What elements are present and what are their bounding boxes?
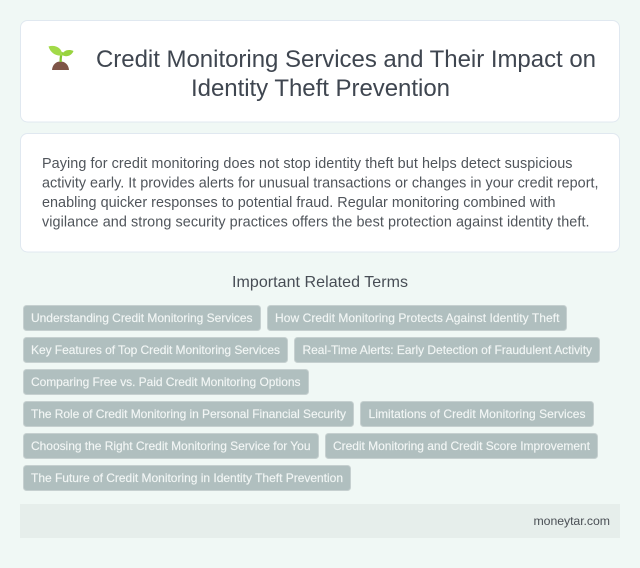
tag: role of credit monitoring: The Role of Credit Monitoring in Personal Financial Security [31, 407, 346, 421]
panel: title header [20, 20, 620, 122]
heading: important related terms: Important Related Terms [232, 274, 408, 291]
tag: how credit monitoring protects [268, 306, 566, 330]
title: Identity Theft Prevention [191, 75, 450, 102]
tag: limitations [360, 402, 594, 426]
tag: credit score improvement: Credit Monitoring and Credit Score Improvement [333, 439, 591, 453]
tag: role of credit monitoring [24, 402, 354, 426]
title: Credit Monitoring Services and Their Impact on [96, 46, 596, 73]
panel: summary paragraph [20, 134, 620, 252]
tag: limitations: Limitations of Credit Monitoring Services [368, 407, 586, 421]
tag: credit score improvement [326, 434, 598, 458]
tag: comparing free vs paid [24, 370, 308, 394]
tag: choosing the right service: Choosing the Right Credit Monitoring Service for You [31, 439, 310, 453]
summary text: Paying for credit monitoring does not stop identity theft but helps detect suspicious [42, 156, 572, 172]
footer bar: moneytar.com [534, 514, 610, 528]
summary text [42, 156, 598, 230]
tag: how credit monitoring protects: How Credit Monitoring Protects Against Identity Theft [275, 311, 560, 325]
summary text: activity early. It provides alerts for unusual transactions or changes in your credit report, [42, 176, 598, 192]
title [96, 46, 596, 102]
tag: future of credit monitoring: The Future of Credit Monitoring in Identity Theft Prevention [31, 471, 343, 485]
tag list [24, 306, 600, 490]
tag: understanding credit monitoring: Understanding Credit Monitoring Services [31, 311, 252, 325]
tag: real-time alerts [294, 338, 600, 362]
tag: understanding credit monitoring [24, 306, 260, 330]
tag: real-time alerts: Real-Time Alerts: Early Detection of Fraudulent Activity [302, 343, 592, 357]
tag: key features: Key Features of Top Credit Monitoring Services [31, 343, 280, 357]
icon: seedling [48, 46, 74, 70]
tag: future of credit monitoring [24, 466, 350, 490]
tag: choosing the right service [24, 434, 318, 458]
summary text: vigilance and strong security practices offers the best protection against identity theft. [42, 214, 590, 230]
tag: key features [24, 338, 288, 362]
footer bar [20, 504, 620, 538]
summary text: enabling quicker responses to potential fraud. Regular monitoring combined with [42, 195, 556, 211]
tag: comparing free vs paid: Comparing Free vs. Paid Credit Monitoring Options [31, 375, 300, 389]
